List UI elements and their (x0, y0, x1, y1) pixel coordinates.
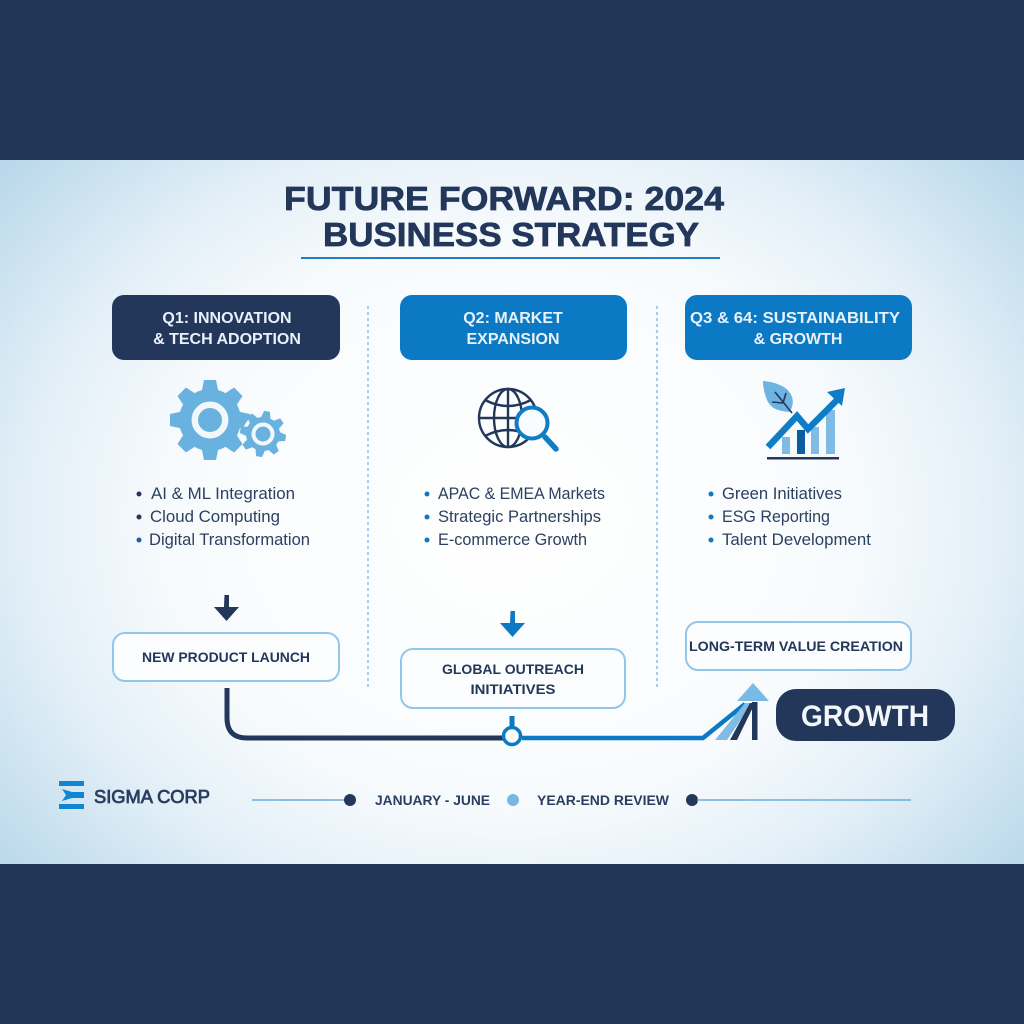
Q1 bullet list: Cloud Computing (150, 508, 280, 526)
Q3 bullet list: Talent Development (722, 531, 871, 549)
column dividers (368, 306, 657, 690)
Q1 bullet list: Digital Transformation (149, 531, 310, 549)
Q3 bullet list: ESG Reporting (722, 508, 830, 526)
Q1 outcome box (113, 633, 339, 681)
Q1 heading (112, 295, 340, 360)
main background panel (0, 160, 1024, 864)
Q2 outcome box: INITIATIVES (470, 681, 556, 697)
Q1 heading: & TECH ADOPTION (153, 331, 301, 348)
footer timeline (252, 793, 911, 808)
Q3 outcome box (686, 622, 911, 670)
icon: leaf and growth chart (763, 381, 845, 460)
title: FUTURE FORWARD: 2024 (284, 180, 725, 217)
panel: Q3 and Q4 sustainability (685, 295, 912, 670)
Q2 bullet list (424, 485, 605, 549)
Q1 heading: Q1: INNOVATION (162, 310, 292, 327)
Q3 heading (685, 295, 912, 360)
Q2 bullet list: E-commerce Growth (438, 531, 587, 549)
Q2 outcome box: GLOBAL OUTREACH (442, 661, 584, 677)
icon: gears (170, 380, 290, 461)
logo: Sigma Corp: SIGMA CORP (94, 787, 210, 807)
arrow: Q2 down (500, 611, 525, 637)
Q3 heading: Q3 & 64: SUSTAINABILITY (690, 310, 900, 327)
footer timeline: JANUARY - JUNE (375, 793, 490, 808)
Q3 bullet list: Green Initiatives (722, 485, 842, 503)
Q2 outcome box (401, 649, 625, 708)
title: BUSINESS STRATEGY (323, 216, 699, 253)
bottom navy band (0, 864, 1024, 1024)
panel: Q1 innovation (112, 295, 340, 681)
icon: globe and magnifier (479, 389, 556, 449)
logo: Sigma Corp (59, 781, 210, 809)
title (284, 180, 725, 259)
Q1 bullet list (136, 485, 310, 549)
Q1 outcome box: NEW PRODUCT LAUNCH (142, 649, 310, 665)
growth badge (776, 689, 955, 741)
Q1 bullet list: AI & ML Integration (151, 485, 295, 503)
Q3 outcome box: LONG-TERM VALUE CREATION (689, 638, 903, 654)
Q2 heading: EXPANSION (466, 331, 560, 348)
growth timeline connector (227, 688, 745, 744)
Q2 heading: Q2: MARKET (463, 310, 563, 327)
Q2 heading (400, 295, 627, 360)
Q2 bullet list: APAC & EMEA Markets (438, 485, 605, 503)
footer timeline: YEAR-END REVIEW (537, 793, 669, 808)
Q3 bullet list (708, 485, 871, 549)
arrow: growth (715, 683, 769, 740)
top navy band (0, 0, 1024, 160)
growth badge: GROWTH (801, 700, 929, 733)
panel: Q2 market expansion (400, 295, 627, 708)
Q3 heading: & GROWTH (754, 331, 842, 348)
arrow: Q1 down (214, 595, 239, 621)
Q2 bullet list: Strategic Partnerships (438, 508, 601, 526)
